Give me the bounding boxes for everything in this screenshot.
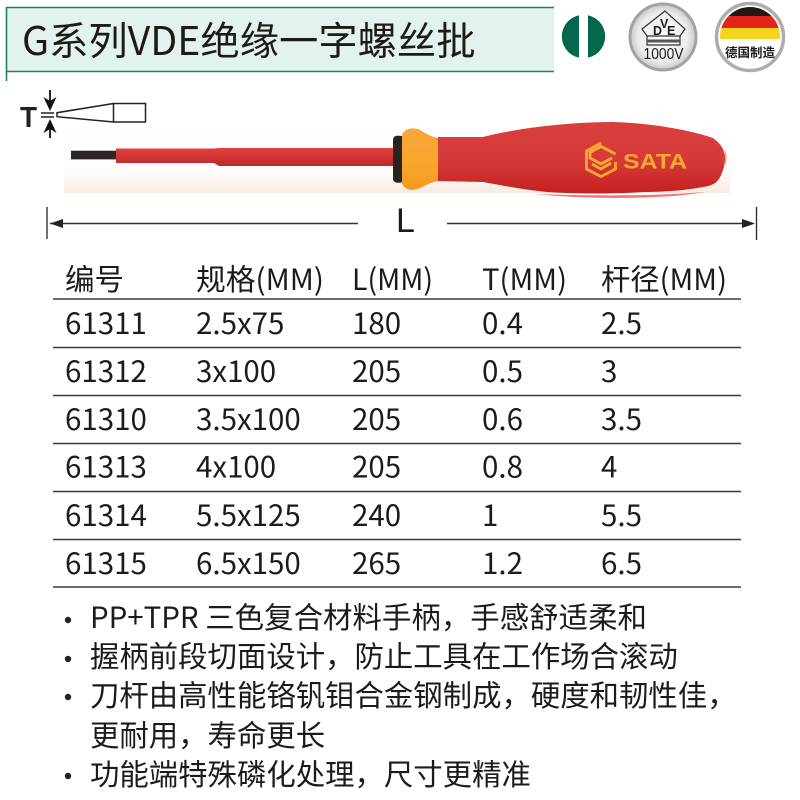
table row 61311: 0.4 (482, 301, 523, 343)
screwdriver orange grip (402, 128, 439, 190)
table row 61315: 6.5 (601, 541, 642, 583)
feature list: PP+TPR 三色复合材料手柄，手感舒适柔和 (90, 595, 647, 637)
icon: made in Germany badge (716, 4, 784, 70)
table row 61313: 205 (352, 444, 401, 486)
icon: VDE 1000V badge: E (667, 24, 675, 38)
table row 61313: 61313 (65, 444, 147, 486)
table row 61310: 61310 (65, 397, 147, 439)
table row 61310: 205 (352, 397, 401, 439)
title: G系列VDE绝缘一字螺丝批 (22, 10, 476, 67)
table row 61311: 2.5x75 (196, 301, 284, 343)
table row 61312: 205 (352, 349, 401, 391)
table row 61311: 61311 (65, 301, 147, 343)
table header: 编号 (65, 257, 124, 299)
table row 61315: 6.5x150 (196, 541, 301, 583)
table header: T(MM) (482, 257, 567, 299)
screwdriver photo (64, 118, 730, 198)
SATA logo (586, 143, 687, 176)
table row 61311: 2.5 (601, 301, 642, 343)
table row 61311 (65, 301, 642, 343)
screwdriver tip (71, 151, 117, 159)
icon: made in Germany badge: 德国制造 (725, 42, 775, 61)
table row 61313: 4x100 (196, 444, 276, 486)
table row 61313: 4 (601, 444, 617, 486)
table row 61315: 265 (352, 541, 401, 583)
screwdriver red handle (438, 122, 725, 194)
table header: 规格(MM) (196, 257, 324, 299)
table row 61310: 0.6 (482, 397, 523, 439)
table row 61314: 5.5 (601, 493, 642, 535)
table row 61314: 61314 (65, 493, 147, 535)
table row 61312: 3 (601, 349, 617, 391)
screwdriver collar (393, 136, 404, 183)
table row 61312: 3x100 (196, 349, 276, 391)
icon: VDE 1000V badge: 1000V (644, 46, 684, 63)
diagram: blade thickness T (20, 90, 146, 138)
icon: VDE 1000V badge (630, 4, 696, 70)
table row 61313 (65, 444, 617, 486)
screwdriver insulated shaft (116, 148, 393, 166)
table row 61315 (65, 541, 642, 583)
table row 61312: 0.5 (482, 349, 523, 391)
title banner (6, 8, 554, 81)
icon: VDE 1000V badge: D (653, 24, 662, 38)
feature list (65, 595, 737, 794)
feature list: 刀杆由高性能铬钒钼合金钢制成，硬度和韧性佳， (90, 673, 737, 715)
table row 61311: 180 (352, 301, 401, 343)
icon: insulated tool green circle (562, 13, 605, 60)
table row 61310: 3.5x100 (196, 397, 301, 439)
table row 61314 (65, 493, 642, 535)
SATA logo: SATA (623, 150, 687, 174)
table row 61315: 61315 (65, 541, 147, 583)
icon: VDE 1000V badge: V (660, 17, 669, 31)
table row 61312: 61312 (65, 349, 147, 391)
table header (65, 257, 727, 299)
table row 61314: 1 (482, 493, 498, 535)
diagram: blade thickness T: T (20, 102, 37, 134)
feature list: 功能端特殊磷化处理，尺寸更精准 (90, 752, 531, 794)
dimension L: L (396, 202, 415, 240)
table row 61314: 240 (352, 493, 401, 535)
feature list: 握柄前段切面设计，防止工具在工作场合滚动 (90, 634, 678, 676)
spec table (53, 257, 741, 587)
table row 61310 (65, 397, 642, 439)
table header: 杆径(MM) (601, 257, 727, 299)
table row 61313: 0.8 (482, 444, 523, 486)
table row 61312 (65, 349, 617, 391)
table row 61314: 5.5x125 (196, 493, 301, 535)
table row 61310: 3.5 (601, 397, 642, 439)
feature list: 更耐用，寿命更长 (90, 713, 325, 755)
table header: L(MM) (352, 257, 433, 299)
table row 61315: 1.2 (482, 541, 523, 583)
dimension L (47, 202, 756, 240)
